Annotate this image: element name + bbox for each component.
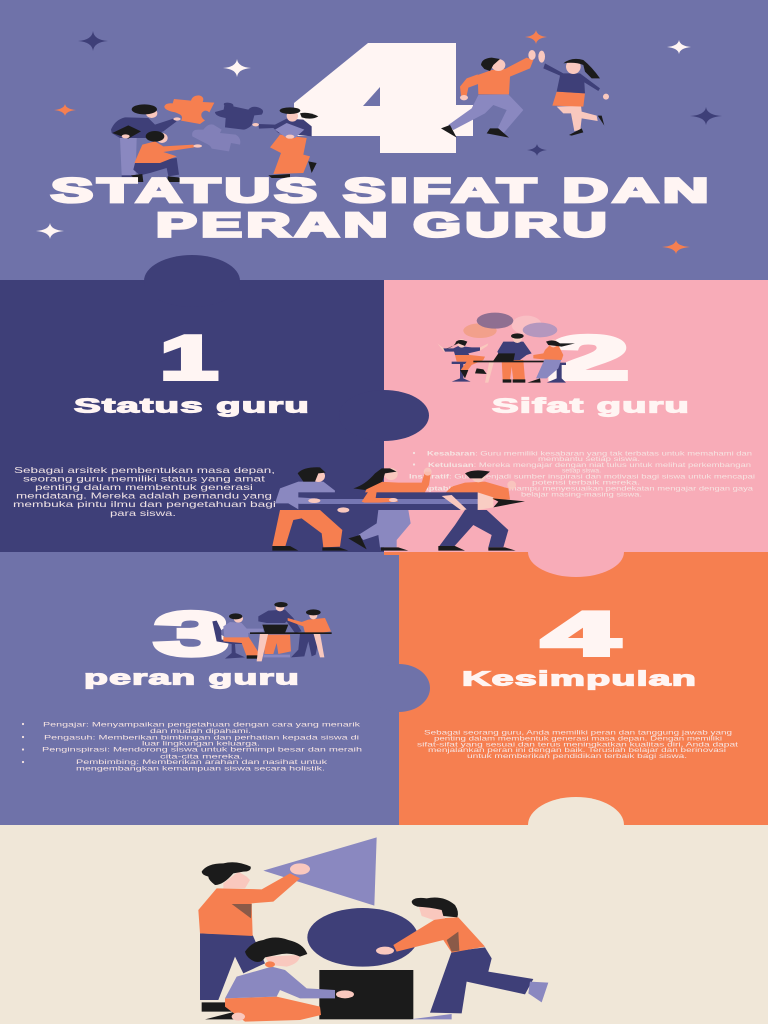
text: sifat guru list: potensi terbaik mereka. — [532, 480, 640, 486]
man at table — [473, 333, 547, 383]
number 4: 4 — [542, 600, 620, 669]
text: kesimpulan body: untuk memberikan pendidikan terbaik bagi siswa. — [467, 753, 687, 760]
heading: status guru: Status guru — [74, 396, 310, 418]
text: peran guru list — [22, 722, 363, 772]
big number 4 counter — [363, 87, 380, 106]
seated woman left — [437, 339, 488, 382]
big number 4 — [294, 43, 473, 153]
text: status guru body: mendatang. Mereka adalah pemandu yang — [16, 491, 272, 501]
panel: status guru background — [0, 255, 384, 552]
man with lavender shirt — [272, 467, 348, 551]
text: peran guru list: Pengajar: Menyampaikan pengetahuan dengan cara yang menarik — [43, 722, 361, 728]
text: sifat guru list — [409, 450, 755, 498]
illustration: carrying pencil — [272, 467, 525, 551]
text: sifat guru list: Ketulusan : Mereka mengajar dengan niat tulus untuk melihat perkembangan — [428, 462, 752, 469]
orange strip under sifat guru — [384, 552, 399, 555]
text: peran guru list: luar lingkungan keluarga. — [142, 740, 260, 747]
puzzle piece navy — [215, 103, 263, 130]
text: status guru body: Sebagai arsitek pembentukan masa depan, — [14, 465, 275, 475]
person pushing circle — [376, 897, 548, 1019]
panel: header background — [0, 0, 768, 280]
text: peran guru list: dan mudah dipahami. — [150, 728, 251, 735]
chair — [212, 621, 245, 659]
text: kesimpulan body: menjalankan peran ini dengan baik. Teruslah belajar dan berinovasi — [428, 747, 726, 754]
illustration: high five — [441, 50, 609, 138]
illustration: building shapes together — [198, 837, 548, 1022]
star decorations — [36, 30, 722, 254]
person standing with puzzle — [111, 104, 181, 180]
text: peran guru list: Penginspirasi: Mendorong siswa untuk bermimpi besar dan meraih — [42, 746, 363, 754]
heading: peran guru: peran guru — [84, 668, 300, 690]
text: status guru body: penting dalam membentuk generasi — [35, 482, 253, 492]
illustration: discussion group — [437, 313, 575, 383]
puzzle piece lavender — [192, 124, 240, 151]
text: peran guru list: Pengasuh: Memberikan bimbingan dan perhatian kepada siswa di — [44, 734, 359, 741]
man carrying pencil — [438, 470, 516, 551]
panel: illustration background — [0, 797, 768, 1024]
heading: sifat guru: Sifat guru — [492, 396, 690, 418]
text: status guru body: seorang guru memiliki status yang amat — [23, 474, 266, 484]
puzzle knob: peran guru — [368, 664, 430, 712]
number 3: 3 — [154, 600, 229, 669]
text: sifat guru list: Adaptabilitas : Mereka mampu menyesuaikan pendekatan mengajar dengan gaya — [411, 486, 754, 492]
speech bubbles — [463, 313, 557, 338]
triangle shape — [263, 837, 377, 906]
woman with puzzle — [252, 107, 318, 178]
person crouching at square — [225, 937, 354, 1022]
number 1: 1 — [160, 324, 218, 393]
text: kesimpulan body: Sebagai seorang guru, Anda memiliki peran dan tanggung jawab yang — [424, 730, 733, 736]
number 2: 2 — [548, 324, 629, 393]
text: status guru body: membuka pintu ilmu dan pengetahuan bagi — [13, 499, 276, 509]
text: kesimpulan body: sifat-sifat yang sesuai dan terus meningkatkan kualitas diri, Anda dapat — [417, 741, 738, 748]
text: peran guru list: mengembangkan kemampuan siswa secara holistik. — [76, 766, 325, 772]
text: sifat guru list: Inspiratif : Guru menjadi sumber inspirasi dan motivasi bagi siswa untuk mencapai — [409, 474, 755, 480]
person with triangle — [198, 862, 310, 1019]
panel: kesimpulan background — [399, 552, 768, 825]
panel: sifat guru background — [384, 280, 768, 552]
seated person — [223, 613, 263, 659]
arms over pencil — [288, 492, 467, 511]
puzzle knob: status guru — [339, 390, 429, 441]
standing person — [257, 602, 302, 661]
circle shape — [307, 908, 418, 967]
text: sifat guru list: membantu setiap siswa. — [538, 456, 640, 463]
title: STATUS SIFAT DAN — [51, 172, 713, 210]
text: kesimpulan body — [417, 730, 738, 760]
standing woman — [288, 609, 331, 657]
puzzle knob: sifat guru — [528, 527, 624, 577]
square shape — [319, 970, 413, 1019]
woman with orange shirt — [348, 468, 432, 551]
title — [51, 172, 713, 244]
table — [250, 632, 332, 634]
text: kesimpulan body: penting dalam membentuk generasi masa depan. Dengan memiliki — [434, 736, 722, 742]
text: status guru body: para siswa. — [110, 508, 176, 518]
person crouching — [131, 131, 202, 182]
title: PERAN GURU — [156, 206, 611, 244]
pencil — [298, 492, 525, 513]
heading: kesimpulan: Kesimpulan — [462, 668, 697, 690]
text: sifat guru list: setiap siswa. — [562, 468, 601, 474]
illustration: office team — [212, 602, 332, 661]
man jumping — [441, 50, 536, 138]
text: sifat guru list: Kesabaran : Guru memiliki kesabaran yang tak terbatas untuk memahami dan — [427, 450, 753, 458]
text: peran guru list: Pembimbing: Memberikan arahan dan nasihat untuk — [76, 759, 328, 766]
puzzle piece orange — [164, 95, 214, 124]
text: peran guru list: cita-cita mereka. — [160, 753, 243, 760]
text: status guru body — [13, 465, 276, 518]
text: sifat guru list: belajar masing-masing siswa. — [521, 492, 642, 498]
seated woman right — [527, 339, 575, 383]
illustration: puzzle team — [111, 95, 318, 182]
panel: peran guru background — [0, 552, 399, 825]
woman jumping — [538, 51, 609, 136]
